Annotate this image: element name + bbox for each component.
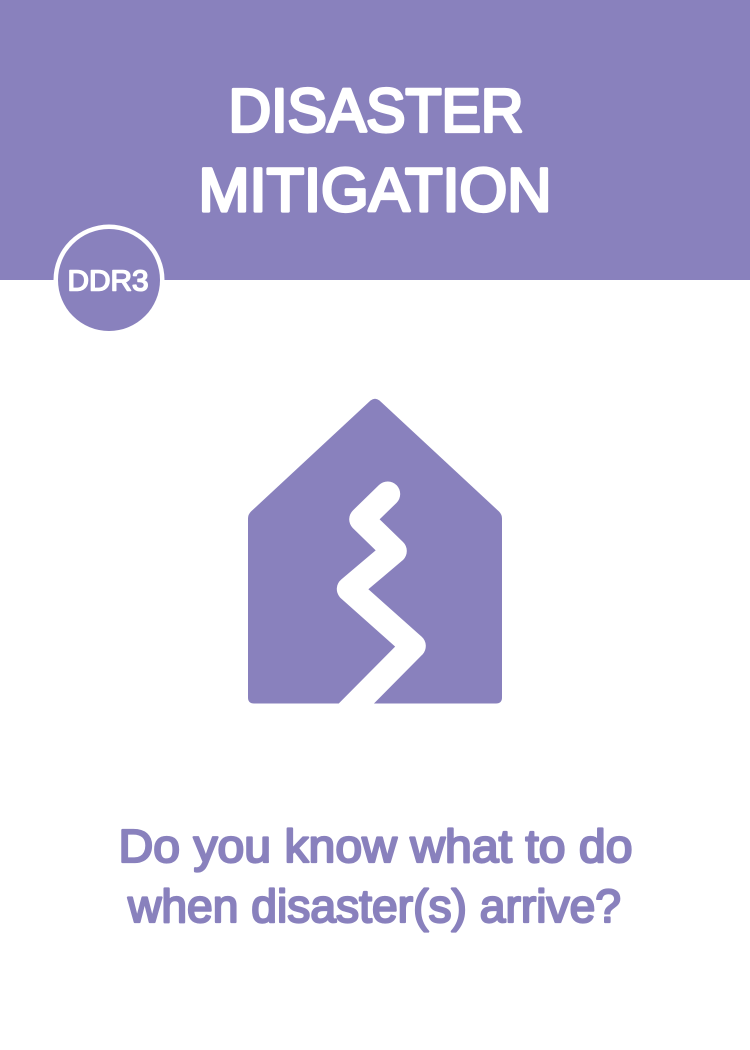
question text: when disaster(s) arrive? bbox=[127, 880, 621, 932]
title bbox=[198, 76, 552, 224]
question text: Do you know what to do bbox=[118, 820, 632, 872]
title: MITIGATION bbox=[198, 156, 552, 224]
question text bbox=[118, 820, 632, 932]
header band bbox=[0, 0, 750, 280]
badge: DDR3 bbox=[54, 224, 164, 336]
icon: house with crack bbox=[248, 399, 502, 720]
badge: DDR3: DDR3 bbox=[68, 266, 148, 298]
title: DISASTER bbox=[228, 76, 524, 144]
